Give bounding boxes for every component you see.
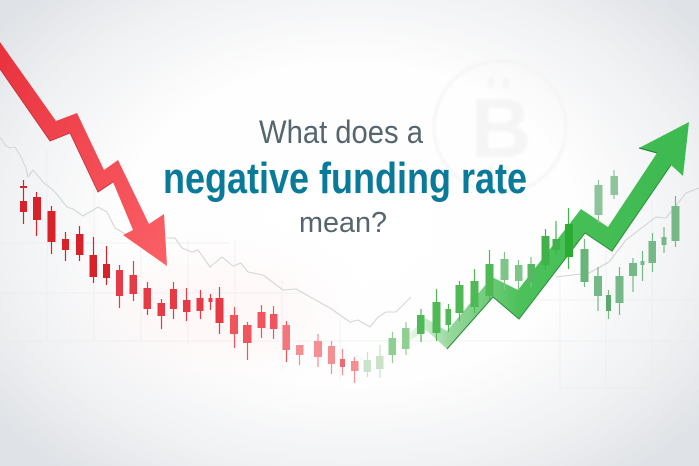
price line [0,137,699,327]
icon: bitcoin watermark: B [471,81,531,175]
title [163,114,527,239]
candlesticks: red falling [20,180,358,383]
chart grid [0,150,699,390]
title line 2: negative funding rate [163,154,527,203]
arrow: red falling [0,42,167,266]
title line 3: mean? [299,207,387,239]
candlesticks: green rising [364,170,680,378]
icon: bitcoin watermark [434,61,566,193]
arrow: green rising [408,122,689,349]
title line 1: What does a [259,114,423,150]
